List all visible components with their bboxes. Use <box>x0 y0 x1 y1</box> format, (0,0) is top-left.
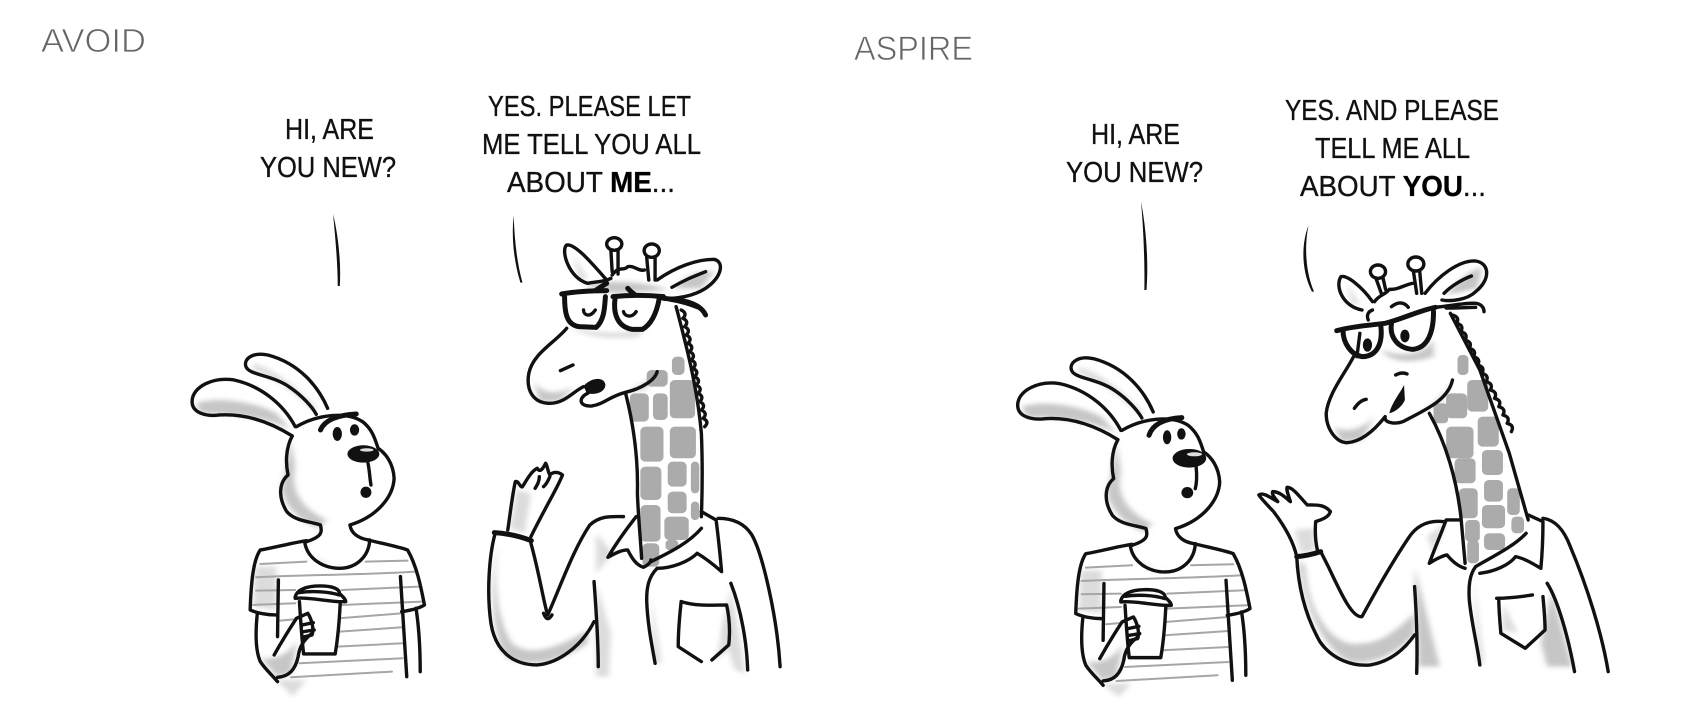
speech: rabbit greeting <box>260 114 396 184</box>
giraffe shading <box>493 255 746 677</box>
speech: giraffe asks about you <box>1285 95 1499 203</box>
speech: rabbit greeting <box>1066 119 1203 189</box>
speech tail lines <box>1141 202 1314 292</box>
speech: giraffe asks about you: YES. AND PLEASE <box>1285 95 1499 127</box>
heading: avoid: AVOID <box>41 22 146 59</box>
speech: giraffe talks about itself: ME TELL YOU ALL <box>482 129 701 161</box>
giraffe outline <box>1259 257 1608 673</box>
rabbit face <box>1149 418 1206 498</box>
speech: giraffe talks about itself <box>482 91 701 199</box>
illustration: aspire characters <box>1018 202 1608 697</box>
panel: avoid scene <box>192 91 780 697</box>
giraffe shading <box>1295 268 1572 667</box>
speech: giraffe talks about itself: ABOUT ME... <box>507 167 675 199</box>
rabbit outline <box>1018 358 1250 685</box>
giraffe cuff, glasses and eyes <box>1297 303 1484 557</box>
rabbit t-shirt stripes <box>1079 564 1247 681</box>
rabbit <box>192 354 424 697</box>
rabbit t-shirt stripes <box>253 561 421 677</box>
giraffe cuff, glasses and eyes <box>494 283 706 541</box>
heading: aspire: ASPIRE <box>854 30 973 68</box>
speech: rabbit greeting: YOU NEW? <box>260 152 396 184</box>
panel: aspire scene <box>1018 95 1608 697</box>
giraffe neck spots <box>1434 355 1524 563</box>
speech: giraffe talks about itself: YES. PLEASE LET <box>488 91 691 123</box>
rabbit outline <box>192 354 424 682</box>
giraffe <box>1259 257 1608 673</box>
rabbit <box>1018 358 1250 697</box>
rabbit shading <box>196 363 348 697</box>
illustration: avoid characters <box>192 214 780 697</box>
speech: rabbit greeting: HI, ARE <box>1091 119 1180 151</box>
rabbit face <box>320 414 379 498</box>
giraffe <box>489 238 780 677</box>
rabbit shading <box>1022 367 1173 697</box>
speech tail lines <box>333 214 522 286</box>
giraffe neck spots <box>630 357 699 567</box>
speech: rabbit greeting: YOU NEW? <box>1066 157 1203 189</box>
speech: rabbit greeting: HI, ARE <box>285 114 374 146</box>
speech: giraffe asks about you: TELL ME ALL <box>1315 133 1470 165</box>
speech: giraffe asks about you: ABOUT YOU... <box>1300 171 1486 203</box>
giraffe outline <box>489 238 780 670</box>
